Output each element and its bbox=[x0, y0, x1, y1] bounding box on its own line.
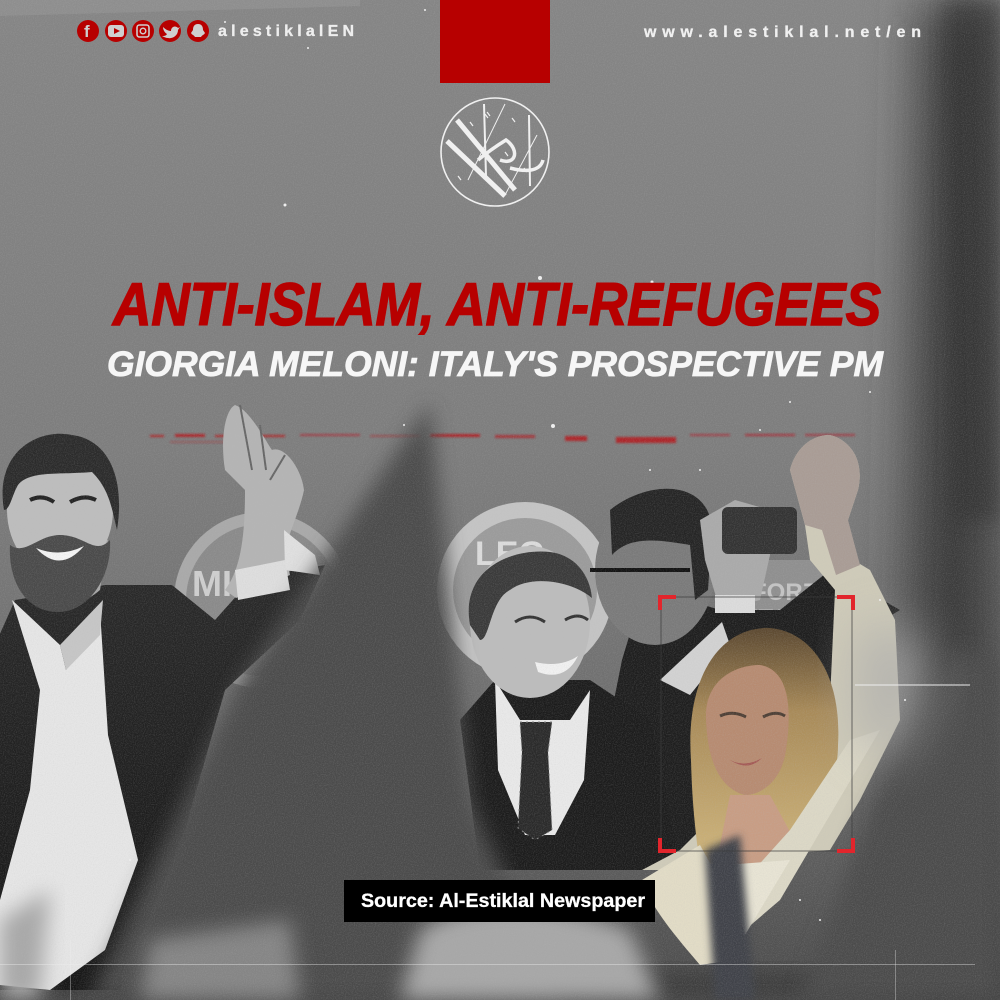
source box bbox=[344, 880, 655, 922]
social icons bbox=[77, 20, 209, 42]
handle: alestiklalEN bbox=[218, 23, 354, 40]
title: ANTI-ISLAM, ANTI-REFUGEES bbox=[111, 271, 881, 338]
foreground blurred flag bbox=[90, 403, 560, 1000]
focus frame with red corners bbox=[658, 595, 855, 853]
photo: logos behind people bbox=[174, 502, 855, 688]
photo: logos behind people: ITALIA bbox=[752, 605, 828, 632]
photo: Salvini, left bbox=[0, 405, 325, 990]
photo: Meloni, right bbox=[642, 435, 900, 965]
photo: logos behind people: LEG bbox=[475, 535, 545, 573]
photo: logos behind people: FORZA bbox=[752, 579, 835, 606]
red strip texture bbox=[150, 434, 855, 443]
subtitle: GIORGIA MELONI: ITALY'S PROSPECTIVE PM bbox=[107, 345, 884, 384]
source box: Source: Al-Estiklal Newspaper bbox=[361, 891, 646, 912]
foreground blurred shapes bbox=[0, 626, 1000, 1000]
social icons: f bbox=[84, 22, 90, 41]
website: www.alestiklal.net/en bbox=[643, 24, 921, 41]
photo: Berlusconi and man with phone, centre bbox=[460, 489, 900, 870]
emblem bbox=[441, 98, 549, 206]
photo: logos behind people: MI bbox=[192, 563, 232, 604]
red tab bbox=[440, 0, 550, 83]
